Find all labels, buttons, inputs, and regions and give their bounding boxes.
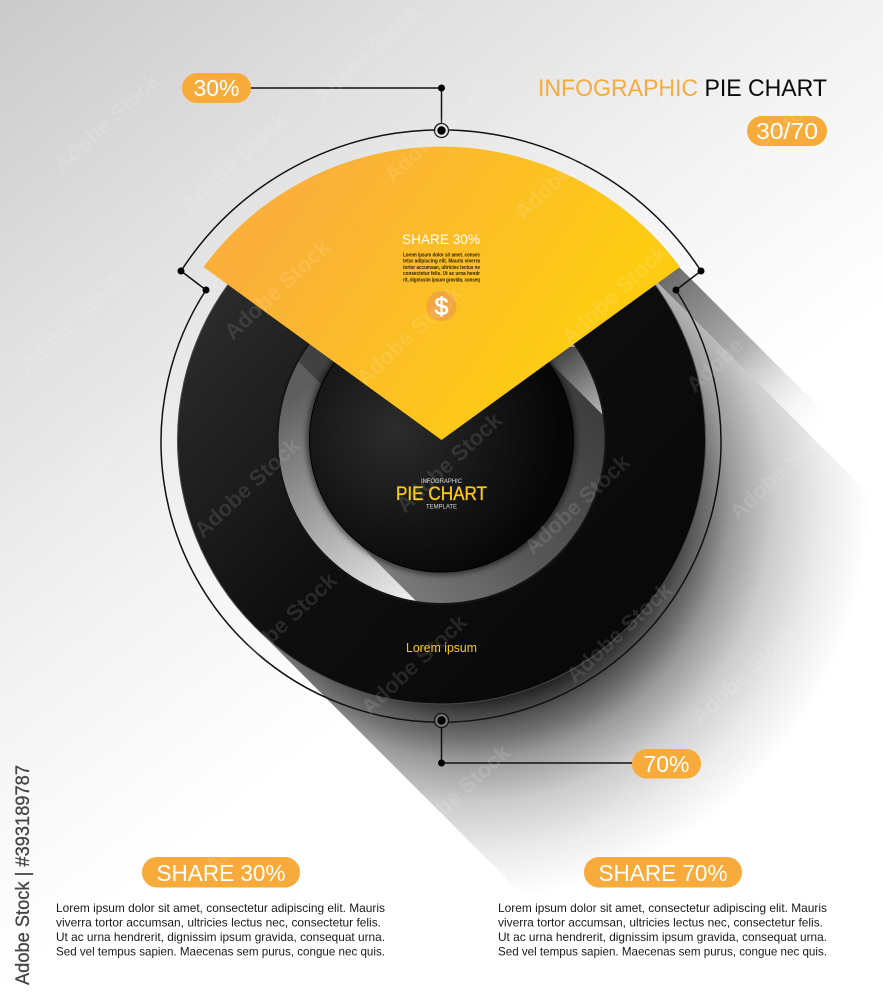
callout line: top arc (181, 130, 701, 271)
watermarks: Adobe Stock (226, 567, 342, 678)
text block: share 70%: Lorem ipsum dolor sit amet, consectetur adipiscing elit. Mauris (498, 901, 827, 915)
callout line: bottom arc (161, 290, 721, 722)
watermarks: Adobe Stock (309, 0, 425, 110)
watermarks: Adobe Stock (731, 747, 847, 858)
text block: share 70%: Sed vel tempus sapien. Maecenas sem purus, congue nec quis. (498, 944, 827, 958)
watermarks: Adobe Stock (351, 280, 467, 391)
gray inner ring (278, 344, 604, 603)
text block: share 70%: viverra tortor accumsan, ultricies lectus nec, consectetur felis. (498, 916, 823, 930)
slice text: SHARE 30% (402, 232, 480, 247)
watermarks: Adobe Stock (51, 402, 167, 513)
text block: share 30% (56, 901, 385, 958)
watermarks: Adobe Stock (14, 267, 130, 378)
connector left (178, 268, 210, 294)
badge: 70%: 70% (644, 751, 690, 777)
title: INFOGRAPHIC PIE CHART (538, 75, 827, 102)
badge: share 30%: SHARE 30% (156, 860, 286, 886)
center label (396, 478, 487, 510)
watermarks: Adobe Stock (686, 619, 802, 730)
slice description: Lorem ipsum dolor sit amet, consec (403, 252, 480, 258)
text block: share 30%: viverra tortor accumsan, ultricies lectus nec, consectetur felis. (56, 916, 381, 930)
badge: 30%: 30% (194, 75, 240, 101)
center label: INFOGRAPHIC (421, 478, 462, 485)
watermarks: Adobe Stock (509, 114, 625, 225)
badge: 30/70: 30/70 (756, 118, 818, 144)
ring shadow stripe (357, 362, 604, 603)
watermarks: Adobe Stock (724, 414, 840, 525)
watermarks: Adobe Stock (556, 239, 672, 350)
text block: share 30%: Sed vel tempus sapien. Maecenas sem purus, congue nec quis. (56, 944, 385, 958)
watermarks: Adobe Stock (219, 234, 335, 345)
yellow 30% slice (204, 147, 680, 440)
text block: share 30%: Ut ac urna hendrerit, dignissim ipsum gravida, consequat urna. (56, 930, 385, 944)
badge: 30/70 (747, 116, 827, 146)
ring outer edge (278, 276, 606, 604)
watermarks: Adobe Stock (356, 609, 472, 720)
slice description: tetur adipiscing elit. Mauris viverra (403, 259, 481, 265)
watermarks: Adobe Stock (561, 577, 677, 688)
watermarks: Adobe Stock (391, 407, 507, 518)
text block: share 70% (498, 901, 827, 958)
leader: 30% (251, 84, 448, 138)
watermarks: Adobe Stock (681, 287, 797, 398)
ring highlight wedge (550, 347, 602, 414)
watermarks: Adobe Stock (399, 739, 515, 850)
icon: dollar (426, 291, 456, 321)
slice description: rit, dignissim ipsum gravida, conseq (403, 277, 480, 283)
text block: share 70%: Ut ac urna hendrerit, dignissim ipsum gravida, consequat urna. (498, 930, 827, 944)
black outer ring (178, 176, 706, 704)
watermarks: Adobe Stock (379, 77, 495, 188)
watermarks: Adobe Stock (176, 107, 292, 218)
watermarks: Adobe Stock (649, 0, 765, 110)
watermarks: Adobe Stock (711, 84, 827, 195)
stock id label: Adobe Stock | #393189787 (13, 765, 34, 985)
badge: share 70%: SHARE 70% (598, 860, 728, 886)
watermarks: Adobe Stock (199, 767, 315, 878)
center label: TEMPLATE (426, 504, 458, 510)
watermarks: Adobe Stock (21, 599, 137, 710)
long shadow of disc (255, 253, 883, 997)
center label: PIE CHART (396, 484, 487, 505)
text block: share 30%: Lorem ipsum dolor sit amet, consectetur adipiscing elit. Mauris (56, 901, 385, 915)
watermarks: Adobe Stock (189, 432, 305, 543)
inner black circle (306, 305, 576, 575)
ring caption: Lorem ipsum (406, 640, 477, 655)
watermarks: Adobe Stock (519, 449, 635, 560)
icon: dollar: $ (435, 293, 449, 321)
long shadow of pie slice (628, 253, 883, 508)
watermarks: Adobe Stock (529, 777, 645, 888)
connector right (672, 268, 704, 294)
badge: 70% (632, 749, 701, 778)
watermarks: Adobe Stock (49, 67, 165, 178)
slice shadow on ring (298, 344, 334, 384)
leader: 70% (434, 714, 632, 766)
slice description (403, 252, 481, 283)
slice text (402, 232, 481, 283)
watermarks: Adobe Stock (66, 727, 182, 838)
badge: 30% (182, 73, 251, 103)
slice description: consectetur felis. Ut ac urna hendr (403, 271, 481, 277)
slice description: tortor accumsan, ultricies lectus ne (403, 265, 480, 271)
